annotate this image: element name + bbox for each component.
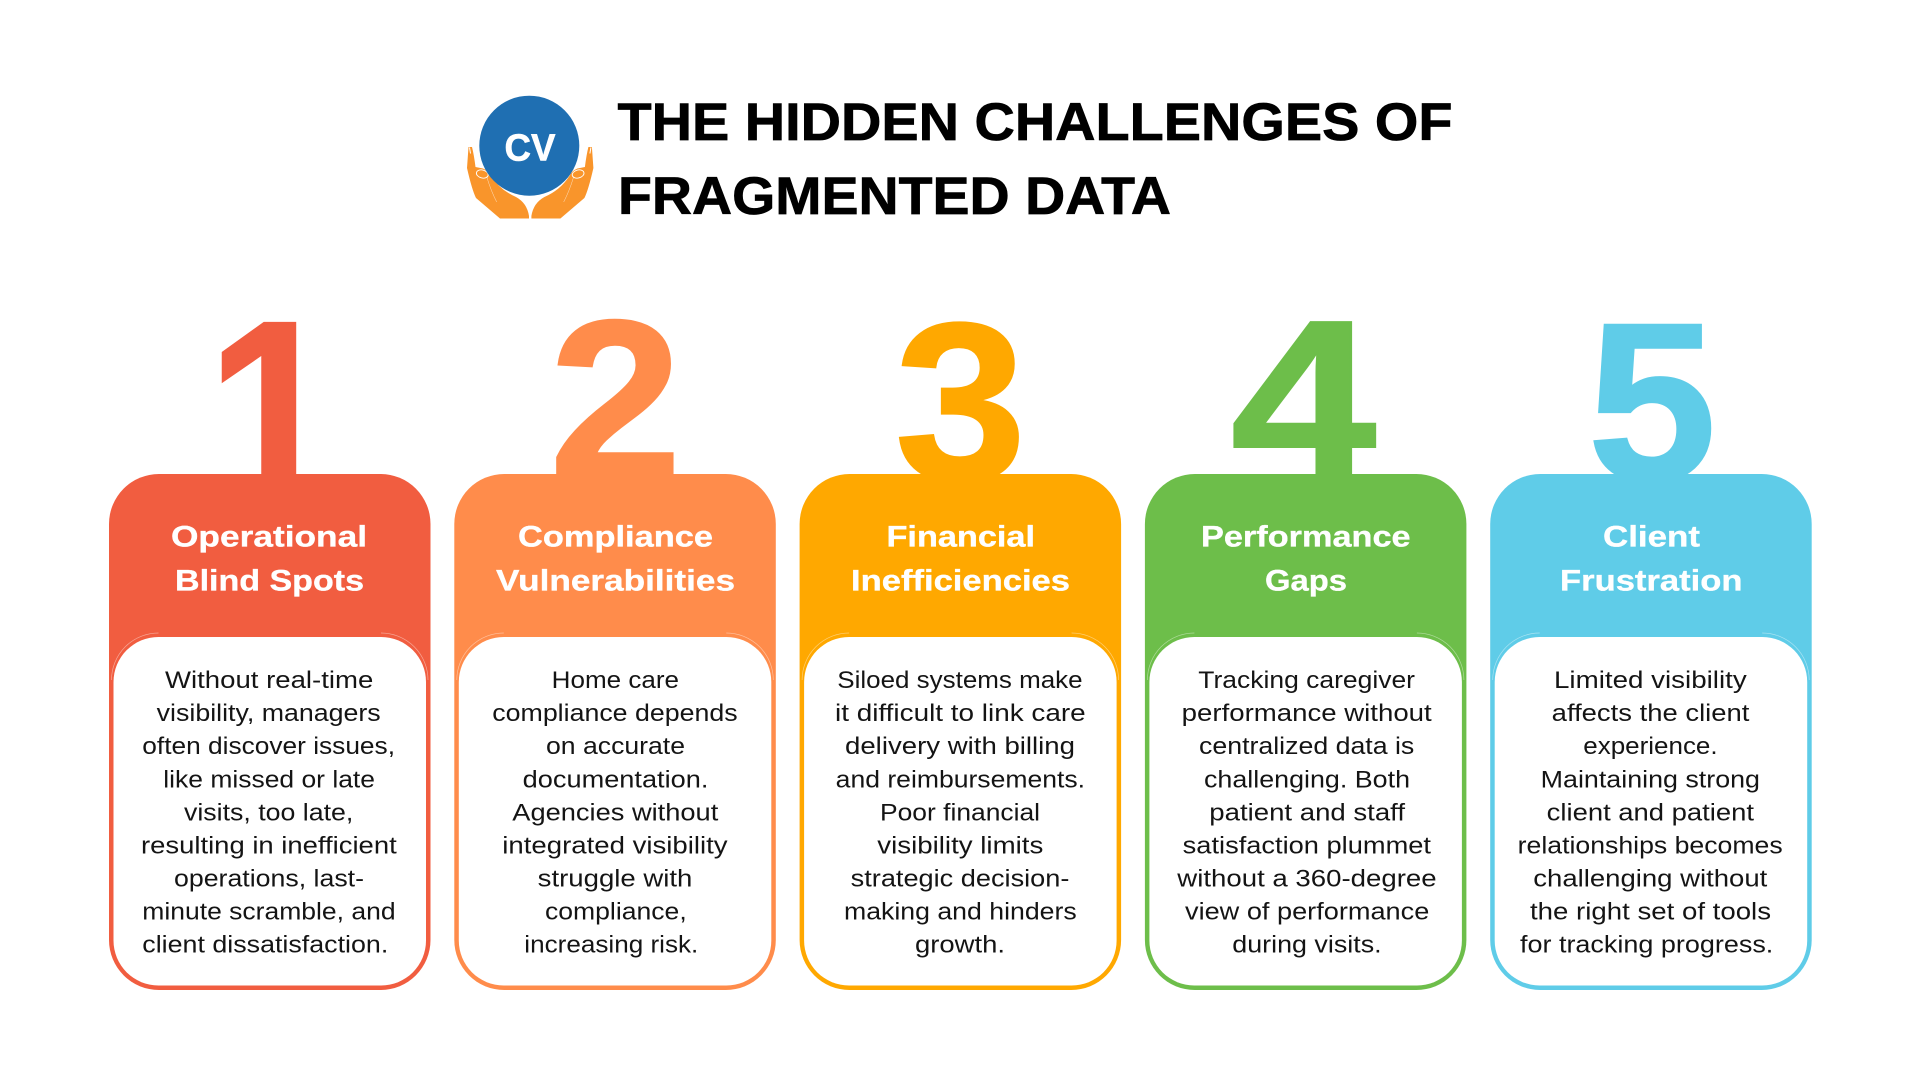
card text: satisfaction plummet <box>1183 832 1431 860</box>
card text: minute scramble, and <box>142 898 396 926</box>
title <box>618 93 1452 226</box>
title: THE HIDDEN CHALLENGES OF <box>618 93 1452 152</box>
card text <box>1518 667 1783 958</box>
card background <box>800 474 1121 990</box>
card text: often discover issues, <box>142 733 395 760</box>
card heading: Performance <box>1201 520 1411 554</box>
card background <box>109 474 430 990</box>
card text: experience. <box>1583 733 1718 760</box>
card text: during visits. <box>1232 932 1382 958</box>
card text: relationships becomes <box>1518 832 1783 860</box>
card text: patient and staff <box>1209 800 1405 826</box>
card heading: Vulnerabilities <box>496 564 735 598</box>
card text: operations, last- <box>174 866 364 892</box>
card text: client dissatisfaction. <box>142 932 388 958</box>
card text <box>835 667 1086 958</box>
card text: Poor financial <box>880 800 1040 826</box>
card text: challenging without <box>1533 866 1768 892</box>
panel: financial inefficiencies <box>800 276 1121 990</box>
card text: struggle with <box>538 866 692 892</box>
card text: delivery with billing <box>845 733 1075 760</box>
card text: challenging. Both <box>1204 766 1410 794</box>
card text <box>492 667 738 958</box>
card text: performance without <box>1182 700 1432 727</box>
card text: like missed or late <box>163 766 375 794</box>
panel: compliance vulnerabilities <box>454 272 776 990</box>
card white body <box>459 637 771 986</box>
card text: without a 360-degree <box>1176 866 1437 892</box>
number 3: 3 <box>895 276 1026 529</box>
number 5: 5 <box>1587 276 1717 528</box>
logo letters: CV <box>504 128 556 170</box>
icon: left hand <box>467 147 529 218</box>
card text: for tracking progress. <box>1520 932 1773 958</box>
card heading <box>1201 520 1411 598</box>
card text: it difficult to link care <box>835 700 1086 727</box>
card text: visibility, managers <box>157 700 381 727</box>
card white body <box>804 637 1117 986</box>
card text: affects the client <box>1552 700 1750 727</box>
card background <box>1490 474 1812 990</box>
panel: operational blind spots <box>109 267 430 990</box>
card heading <box>851 520 1070 598</box>
panel: client frustration <box>1490 276 1812 990</box>
card text: and reimbursements. <box>836 766 1085 794</box>
card background <box>454 474 776 990</box>
number 2: 2 <box>549 272 682 528</box>
card text: view of performance <box>1185 898 1429 926</box>
card heading: Gaps <box>1265 564 1347 598</box>
card text: compliance depends <box>492 700 738 727</box>
card text: Home care <box>552 667 679 694</box>
card text: Maintaining strong <box>1541 766 1760 794</box>
card text: centralized data is <box>1199 733 1414 760</box>
card text: client and patient <box>1547 800 1754 826</box>
card text <box>1176 667 1437 958</box>
card text: the right set of tools <box>1530 898 1771 926</box>
number 4: 4 <box>1231 274 1376 528</box>
card text <box>141 667 397 958</box>
card text: Limited visibility <box>1554 667 1747 694</box>
card heading <box>1560 520 1742 598</box>
card white body <box>1495 637 1807 986</box>
card text: compliance, <box>545 898 687 926</box>
card heading <box>496 520 735 598</box>
card text: Without real-time <box>165 667 373 694</box>
card white body <box>1149 637 1462 986</box>
card heading: Financial <box>886 520 1035 554</box>
card heading: Frustration <box>1560 564 1742 598</box>
card text: documentation. <box>523 766 708 794</box>
card text: on accurate <box>546 733 685 760</box>
number 1: 1 <box>206 267 340 562</box>
logo: CV in caring hands <box>467 96 593 218</box>
panel: performance gaps <box>1145 274 1466 990</box>
card text: integrated visibility <box>502 832 728 860</box>
icon: right hand <box>531 147 593 218</box>
card text: visits, too late, <box>184 800 353 826</box>
card text: visibility limits <box>877 832 1043 860</box>
card text: increasing risk. <box>524 932 698 958</box>
card heading <box>171 520 367 598</box>
card text: resulting in inefficient <box>141 832 397 860</box>
card text: Siloed systems make <box>837 667 1083 694</box>
card text: Agencies without <box>512 800 719 826</box>
icon: blue circle <box>479 96 579 196</box>
card heading: Inefficiencies <box>851 564 1070 598</box>
card white body <box>114 637 426 986</box>
card heading: Operational <box>171 520 367 554</box>
card text: making and hinders <box>844 898 1077 926</box>
card heading: Client <box>1603 520 1700 554</box>
card heading: Compliance <box>518 520 713 554</box>
card text: strategic decision- <box>851 866 1069 892</box>
card text: growth. <box>915 932 1005 958</box>
card background <box>1145 474 1466 990</box>
card heading: Blind Spots <box>175 564 364 598</box>
title: FRAGMENTED DATA <box>618 167 1171 226</box>
card text: Tracking caregiver <box>1198 667 1415 694</box>
